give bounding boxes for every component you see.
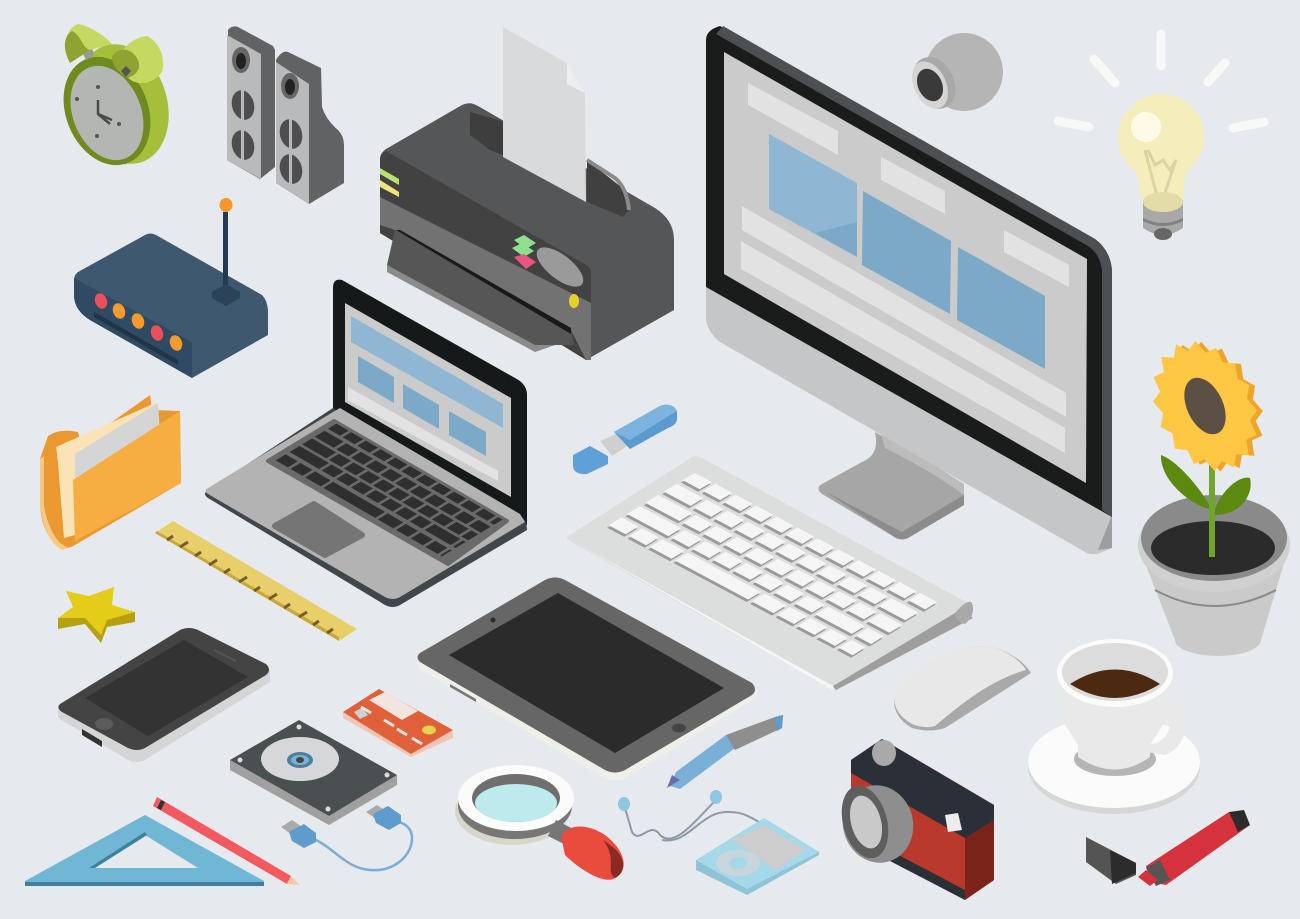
stem and leaves (1161, 455, 1251, 557)
icon: speakers (227, 26, 344, 204)
icon: light bulb (1058, 34, 1264, 240)
panel: tablet (417, 578, 756, 780)
icon: magnifying glass (455, 765, 624, 880)
rays (1058, 34, 1264, 128)
laptop base (205, 408, 527, 607)
icon: star (58, 587, 135, 643)
laptop lid (333, 280, 527, 525)
icon: pencil (153, 797, 300, 885)
icon: earphones and music player (618, 790, 819, 895)
trackpad (275, 504, 362, 555)
icon: set square (25, 815, 264, 886)
icon: hard drive (230, 720, 397, 825)
icon: potted sunflower (1132, 322, 1290, 656)
icon: marker pen (667, 715, 783, 789)
icon: highlighter and cap (1086, 810, 1250, 886)
flower head (1132, 322, 1284, 491)
icon: USB flash drive (573, 405, 677, 474)
panel: laptop (205, 280, 527, 607)
monitor body (706, 287, 1112, 554)
icon: credit card (343, 689, 453, 757)
keyboard keys (615, 476, 933, 651)
panel: wireless keyboard (566, 456, 973, 690)
icon: coffee cup and saucer (1028, 639, 1200, 814)
icon: router (74, 198, 268, 378)
icon: alarm clock (48, 24, 183, 178)
panel: desktop monitor (706, 26, 1112, 554)
icon: monitor stand (818, 430, 964, 540)
icon: USB cable (281, 805, 412, 870)
icon: magic mouse (894, 646, 1031, 730)
icon: printer (380, 27, 674, 360)
keyboard key shadows (614, 479, 931, 654)
icon: smartphone (58, 628, 270, 762)
icon: camera (834, 739, 994, 900)
laptop keys (281, 426, 498, 553)
icon: folder (40, 395, 181, 550)
icon: ruler (155, 521, 357, 641)
icon: webcam (904, 33, 1003, 116)
